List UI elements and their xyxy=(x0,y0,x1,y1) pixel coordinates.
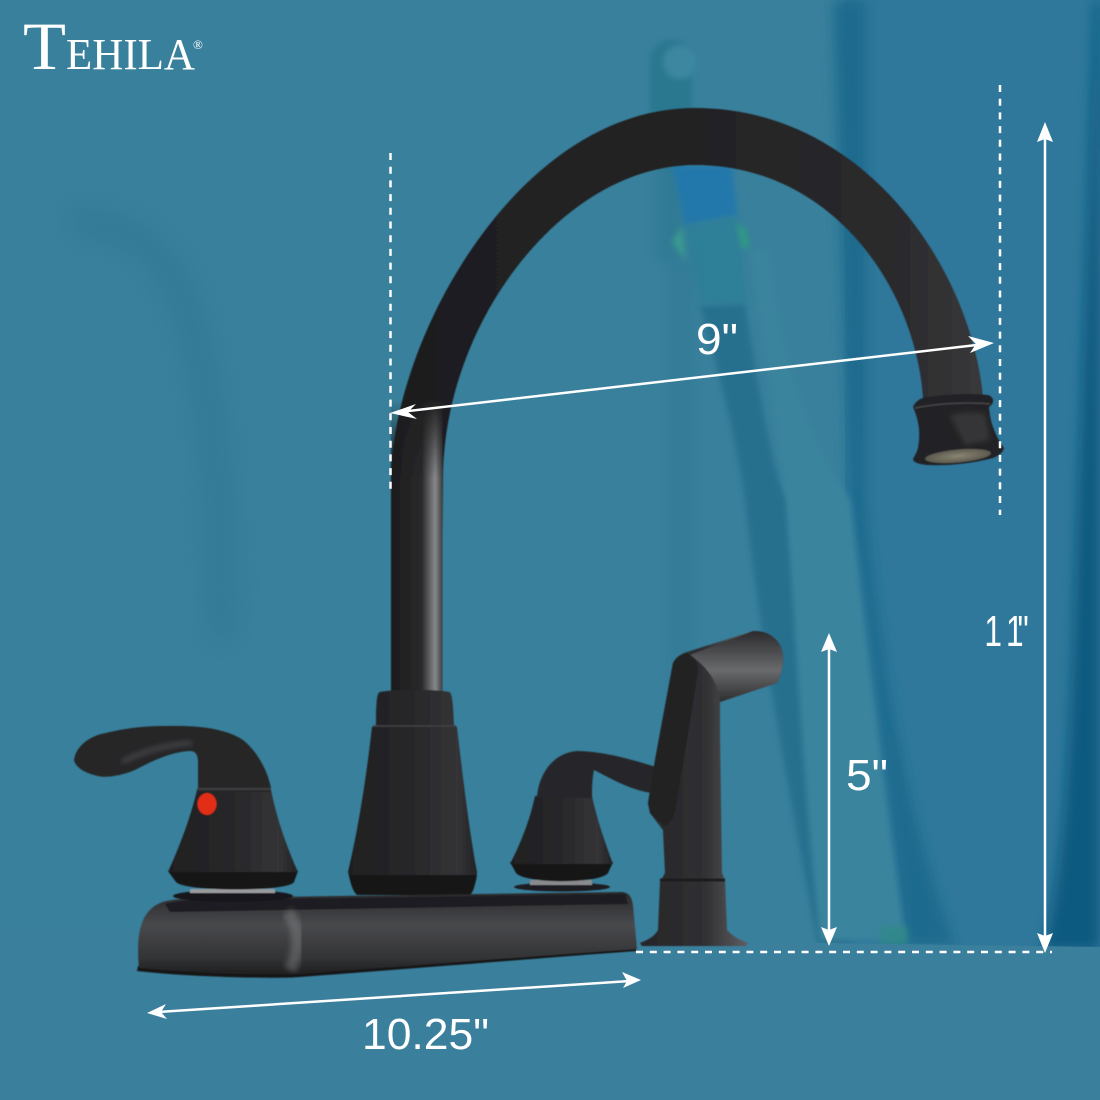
countertop xyxy=(0,925,1100,1100)
right handle xyxy=(510,751,672,892)
label: 11 in: 11" xyxy=(984,607,1029,656)
center column xyxy=(348,690,477,895)
side sprayer xyxy=(640,631,783,946)
base plate xyxy=(137,892,637,978)
spout xyxy=(391,108,983,700)
left handle xyxy=(74,726,298,902)
label: 10.25 in: 10.25" xyxy=(362,1010,489,1059)
logo: Tehila xyxy=(23,8,203,84)
mesh xyxy=(925,447,991,465)
label: 5 in: 5" xyxy=(846,751,888,800)
arrow: 5 in sprayer height xyxy=(821,633,837,946)
label: 9 in: 9" xyxy=(696,315,738,364)
arrow: 10.25 in base width xyxy=(147,972,641,1019)
arrow: 11 in height xyxy=(1037,122,1053,953)
faucet xyxy=(74,108,1004,978)
dashed guide lines xyxy=(390,85,1052,952)
aerator xyxy=(913,394,1004,465)
red hot indicator xyxy=(198,793,216,815)
logo: Tehila: EHILA xyxy=(66,30,195,79)
arrow: 9 in reach xyxy=(390,336,994,419)
logo: Tehila: ® xyxy=(193,37,203,52)
logo: Tehila: T xyxy=(23,8,66,84)
